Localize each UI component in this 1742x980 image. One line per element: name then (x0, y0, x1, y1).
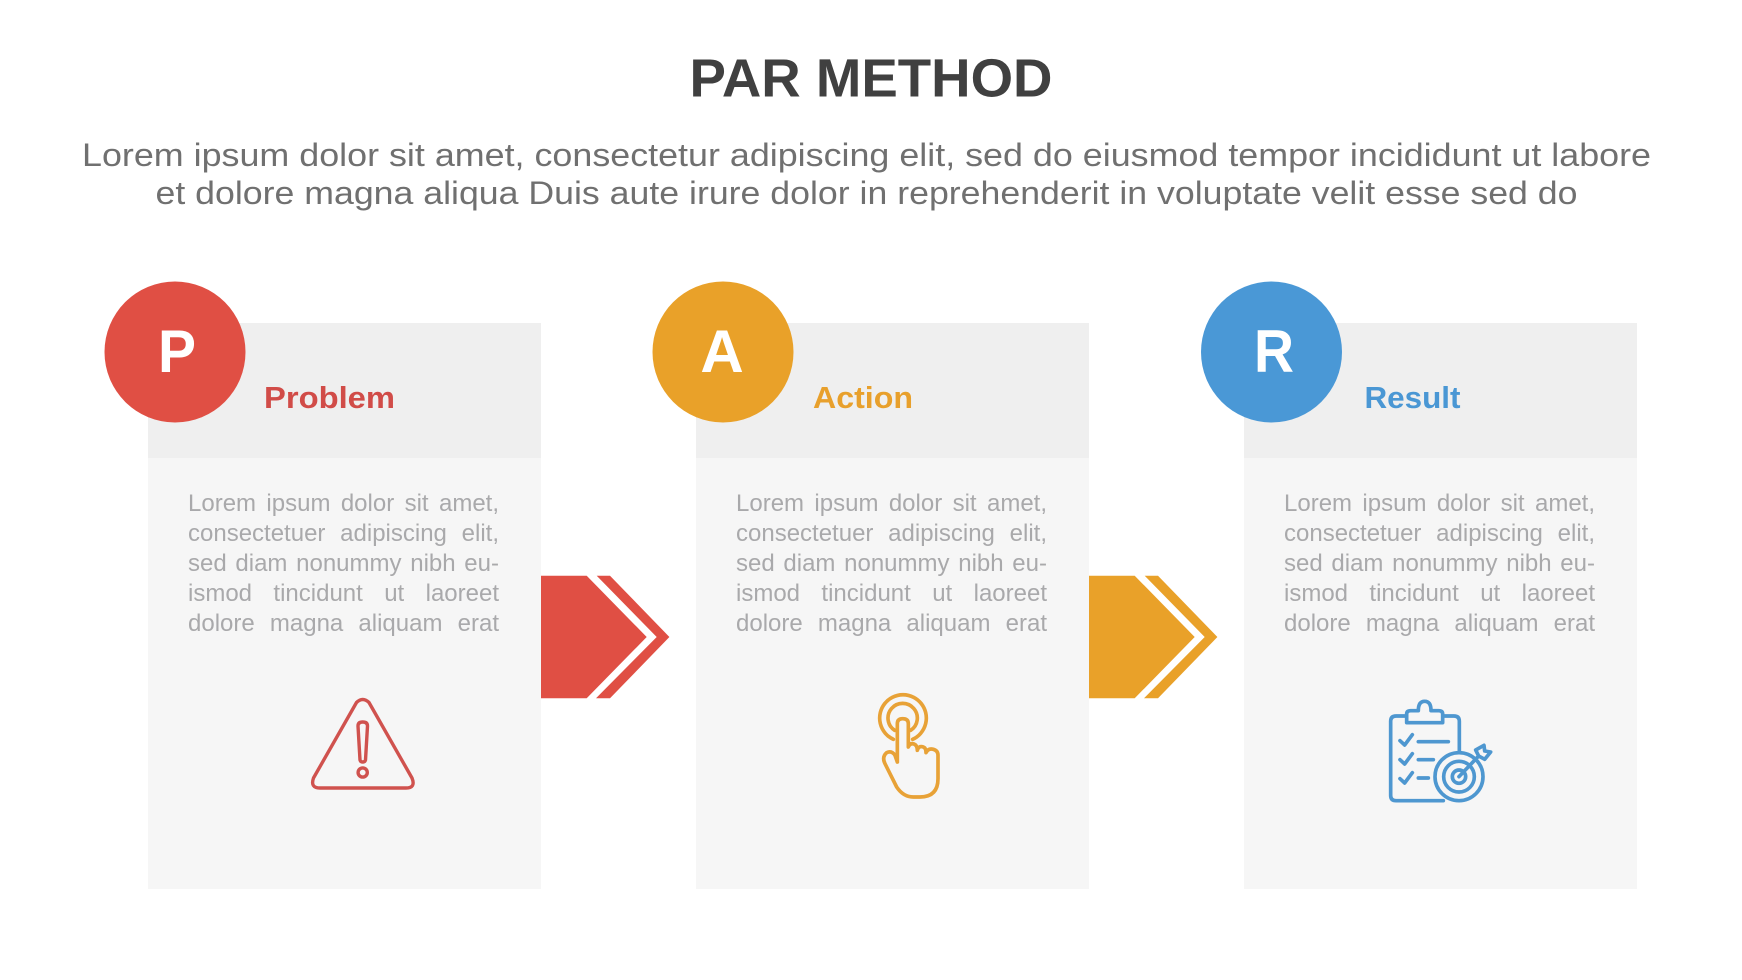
panel: problem (104, 282, 541, 889)
text block: action: dolore magna aliquam erat (736, 610, 1047, 637)
heading: Action: Action (813, 380, 913, 415)
heading: Result: Result (1364, 380, 1460, 415)
text block: action: consectetuer adipiscing elit, (736, 520, 1047, 547)
panel: action (652, 282, 1089, 889)
panel header: result (1244, 323, 1636, 458)
panel: result (1201, 282, 1637, 889)
text block: action: sed diam nonummy nibh eu- (736, 550, 1047, 577)
text block: result: Lorem ipsum dolor sit amet, (1284, 490, 1595, 517)
text block: result (1284, 490, 1595, 637)
text block: action (736, 490, 1047, 637)
panel header: problem (148, 323, 541, 458)
panel body: problem (148, 458, 541, 889)
text block: problem: ismod tincidunt ut laoreet (188, 580, 499, 607)
badge: A (652, 282, 794, 422)
badge: R (1201, 282, 1342, 422)
icon: clipboard with target (1388, 700, 1492, 802)
panel body: action (696, 458, 1089, 889)
subtitle text: Lorem ipsum dolor sit amet, consectetur adipiscing elit, sed do eiusmod tempor incididunt ut labore (82, 137, 1651, 173)
text block: problem: dolore magna aliquam erat (188, 610, 499, 637)
icon: warning triangle (310, 698, 415, 790)
text block: problem: consectetuer adipiscing elit, (188, 520, 499, 547)
text block: action: ismod tincidunt ut laoreet (736, 580, 1047, 607)
panel body: result (1244, 458, 1636, 889)
text block: problem: Lorem ipsum dolor sit amet, (188, 490, 499, 517)
badge: R: R (1254, 318, 1294, 385)
badge: P: P (158, 318, 196, 385)
subtitle text (82, 137, 1651, 211)
heading: Problem: Problem (264, 380, 395, 415)
text block: result: dolore magna aliquam erat (1284, 610, 1595, 637)
text block: result: consectetuer adipiscing elit, (1284, 520, 1595, 547)
text block: problem (188, 490, 499, 637)
text block: result: sed diam nonummy nibh eu- (1284, 550, 1595, 577)
title: PAR METHOD (690, 48, 1052, 108)
panel header: action (696, 323, 1089, 458)
arrow: action to result (1089, 576, 1218, 698)
icon: tapping hand (878, 692, 940, 799)
text block: result: ismod tincidunt ut laoreet (1284, 580, 1595, 607)
subtitle text: et dolore magna aliqua Duis aute irure dolor in reprehenderit in voluptate velit esse sed do (156, 175, 1578, 211)
badge: A: A (700, 318, 744, 385)
text block: problem: sed diam nonummy nibh eu- (188, 550, 499, 577)
text block: action: Lorem ipsum dolor sit amet, (736, 490, 1047, 517)
badge: P (104, 282, 246, 422)
arrow: problem to action (541, 576, 670, 698)
